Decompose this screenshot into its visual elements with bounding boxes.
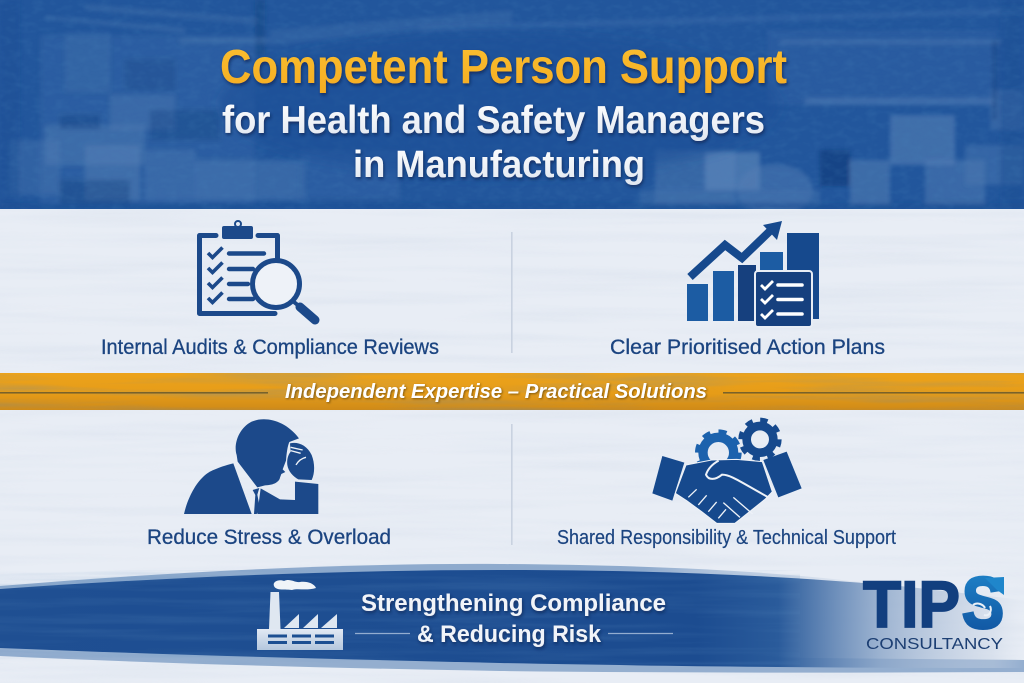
- icon: clipboard and magnifier: [200, 221, 315, 320]
- icon: handshake and gears: [652, 420, 802, 523]
- logo: TIPS Consultancy: TIP: [863, 567, 960, 641]
- icon: factory: [257, 580, 343, 650]
- title line 1: Competent Person Support: [220, 41, 787, 94]
- title line 2: for Health and Safety Managers: [222, 99, 765, 142]
- title line 3: in Manufacturing: [353, 144, 645, 186]
- label: shared responsibility: Shared Responsibility & Technical Support: [557, 526, 896, 549]
- footer banner: [0, 564, 1024, 673]
- panel: internal audits: [101, 221, 439, 359]
- vertical divider lower: [511, 424, 513, 545]
- label: internal audits: Internal Audits & Compliance Reviews: [101, 336, 439, 359]
- header panel: factory photo: [0, 0, 1024, 216]
- footer text: [361, 590, 666, 648]
- banner text: Independent Expertise – Practical Solutions: [285, 381, 707, 403]
- panel: action plans: [610, 221, 885, 359]
- vertical divider upper: [511, 232, 513, 353]
- label: reduce stress: Reduce Stress & Overload: [147, 526, 391, 549]
- banner: independent expertise: [0, 373, 1024, 410]
- footer text: Strengthening Compliance: [361, 590, 666, 617]
- icon: stressed manager: [184, 419, 318, 514]
- panel: reduce stress: [147, 419, 391, 549]
- footer text: & Reducing Risk: [417, 621, 602, 648]
- logo S mark: S: [962, 564, 1004, 644]
- label: action plans: Clear Prioritised Action Plans: [610, 336, 885, 359]
- panel: shared responsibility: [557, 420, 896, 549]
- icon: bar chart with arrow and checklist: [687, 221, 819, 327]
- logo subtitle: CONSULTANCY: [866, 636, 1003, 653]
- title: [220, 41, 787, 186]
- logo: TIPS Consultancy: [863, 564, 1004, 653]
